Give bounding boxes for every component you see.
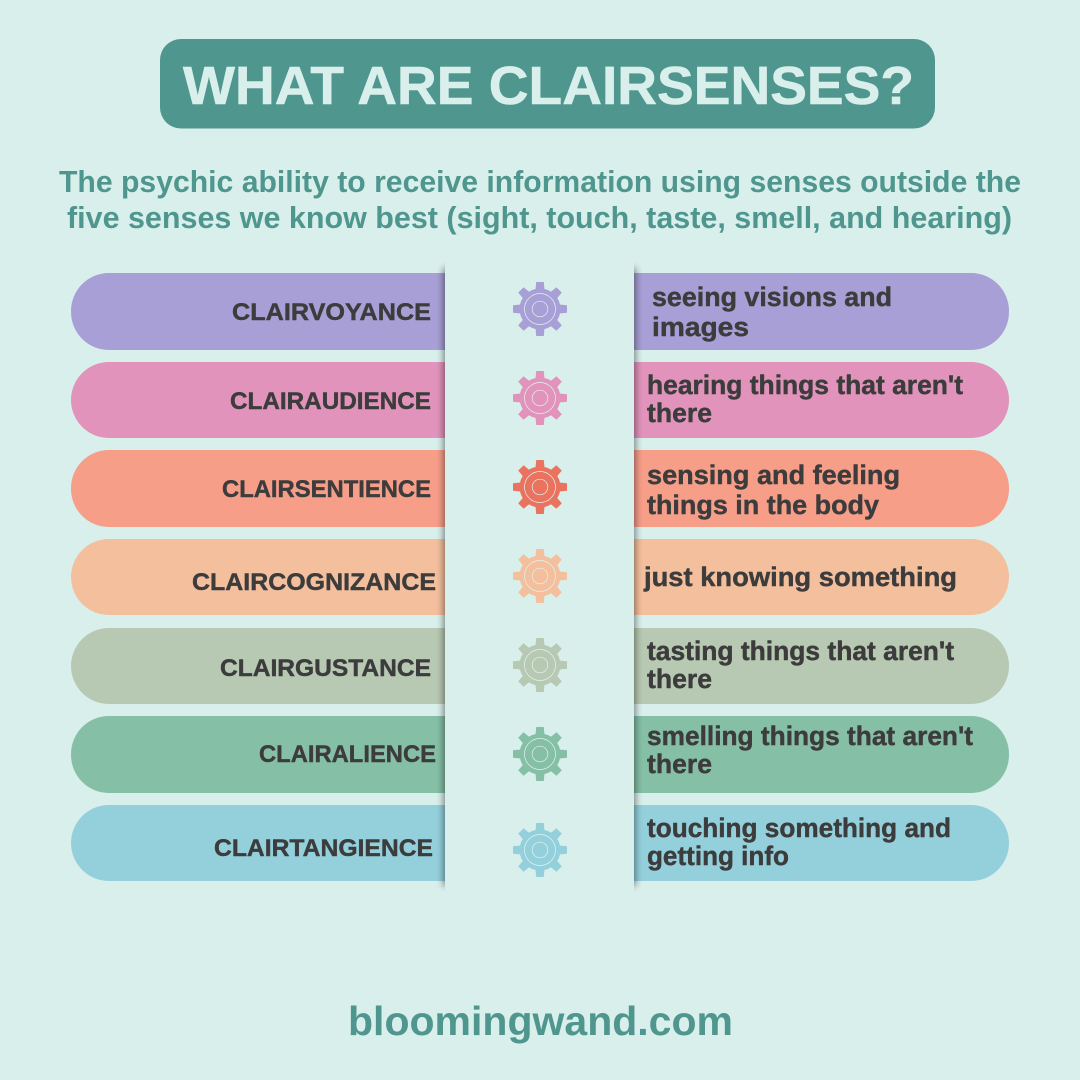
row 5 description: there — [647, 664, 712, 694]
center column shadow — [443, 268, 636, 886]
row 1 description: seeing visions and — [652, 282, 892, 312]
footer website: bloomingwand.com — [348, 998, 733, 1044]
icon: coral gear — [513, 460, 567, 514]
icon: peach gear — [513, 549, 567, 603]
row 3 description: things in the body — [647, 490, 879, 520]
subtitle: The psychic ability to receive information using senses outside the — [59, 164, 1021, 199]
row 2 description — [647, 370, 963, 428]
icon: blue gear — [513, 823, 567, 877]
row 5 description — [647, 636, 954, 694]
row 3 description — [647, 460, 900, 520]
center column — [445, 258, 634, 898]
row 3 description: sensing and feeling — [647, 460, 900, 490]
title banner: WHAT ARE CLAIRSENSES? — [183, 57, 914, 116]
subtitle — [59, 164, 1021, 235]
row 7 description: touching something and — [647, 813, 951, 843]
row 1 description: images — [652, 312, 749, 342]
icon: sage gear — [513, 638, 567, 692]
row 1 description — [652, 282, 892, 342]
row 5: clairgustance label: CLAIRGUSTANCE — [220, 655, 431, 682]
row 7 description: getting info — [647, 841, 789, 871]
right pills — [509, 273, 1009, 881]
icon: pink gear — [513, 371, 567, 425]
title banner — [160, 39, 935, 128]
row 2 description: there — [647, 398, 712, 428]
subtitle: five senses we know best (sight, touch, taste, smell, and hearing) — [67, 200, 1012, 235]
row 3: clairsentience label: CLAIRSENTIENCE — [222, 476, 431, 503]
row 2 description: hearing things that aren't — [647, 370, 963, 400]
row 7 description — [647, 813, 951, 871]
row 6 description: smelling things that aren't — [647, 721, 973, 751]
icon: green gear — [513, 727, 567, 781]
row 7: clairtangience label: CLAIRTANGIENCE — [214, 835, 433, 862]
row 5 description: tasting things that aren't — [647, 636, 954, 666]
row 6 description: there — [647, 749, 712, 779]
row 2: clairaudience label: CLAIRAUDIENCE — [230, 388, 431, 415]
row 4 description: just knowing something — [643, 562, 957, 592]
row 4: claircognizance label: CLAIRCOGNIZANCE — [192, 569, 436, 596]
row 1: clairvoyance label: CLAIRVOYANCE — [232, 299, 431, 326]
row 6: clairalience label: CLAIRALIENCE — [259, 741, 436, 768]
row 6 description — [647, 721, 973, 779]
icon: purple gear — [513, 282, 567, 336]
left pills — [71, 273, 571, 881]
